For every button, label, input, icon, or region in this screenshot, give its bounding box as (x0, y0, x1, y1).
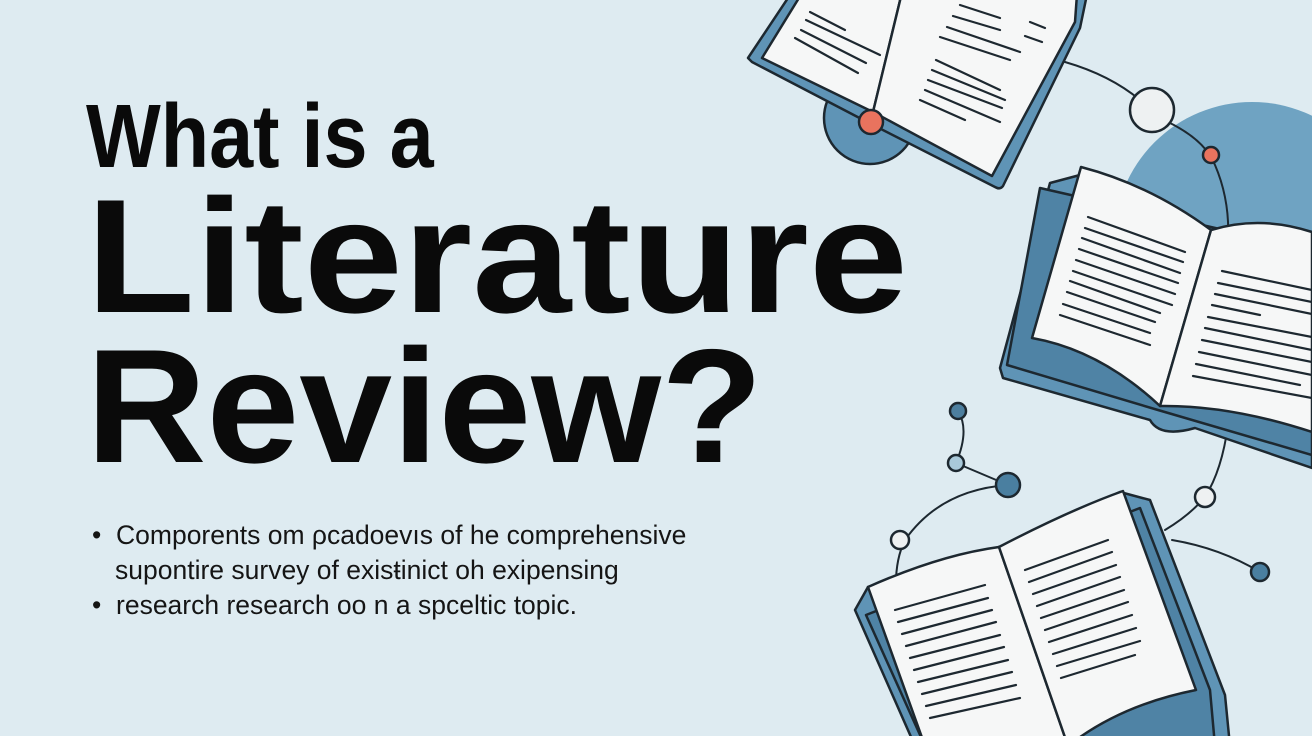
bullet text block: • Comporents om ρcadoevıs of he comprehensive (92, 520, 686, 550)
node dots lower (1195, 487, 1215, 507)
bullet text block: • research research oo n a spceltic topic. (92, 590, 577, 620)
title: Literature: Literature (86, 166, 908, 347)
title: What is a: What is a (86, 87, 434, 187)
title: Review?: Review? (86, 316, 763, 497)
book 2 (1000, 167, 1312, 468)
icon: big blue circle (1114, 102, 1312, 378)
bullet text block: supontire survey of exisŧinict oh exipensing (115, 555, 619, 585)
bullet text block (92, 520, 686, 620)
connector lines top (896, 62, 1260, 590)
book 1 (748, 0, 1090, 188)
book 3 (855, 491, 1230, 736)
node circles top (1130, 88, 1174, 132)
